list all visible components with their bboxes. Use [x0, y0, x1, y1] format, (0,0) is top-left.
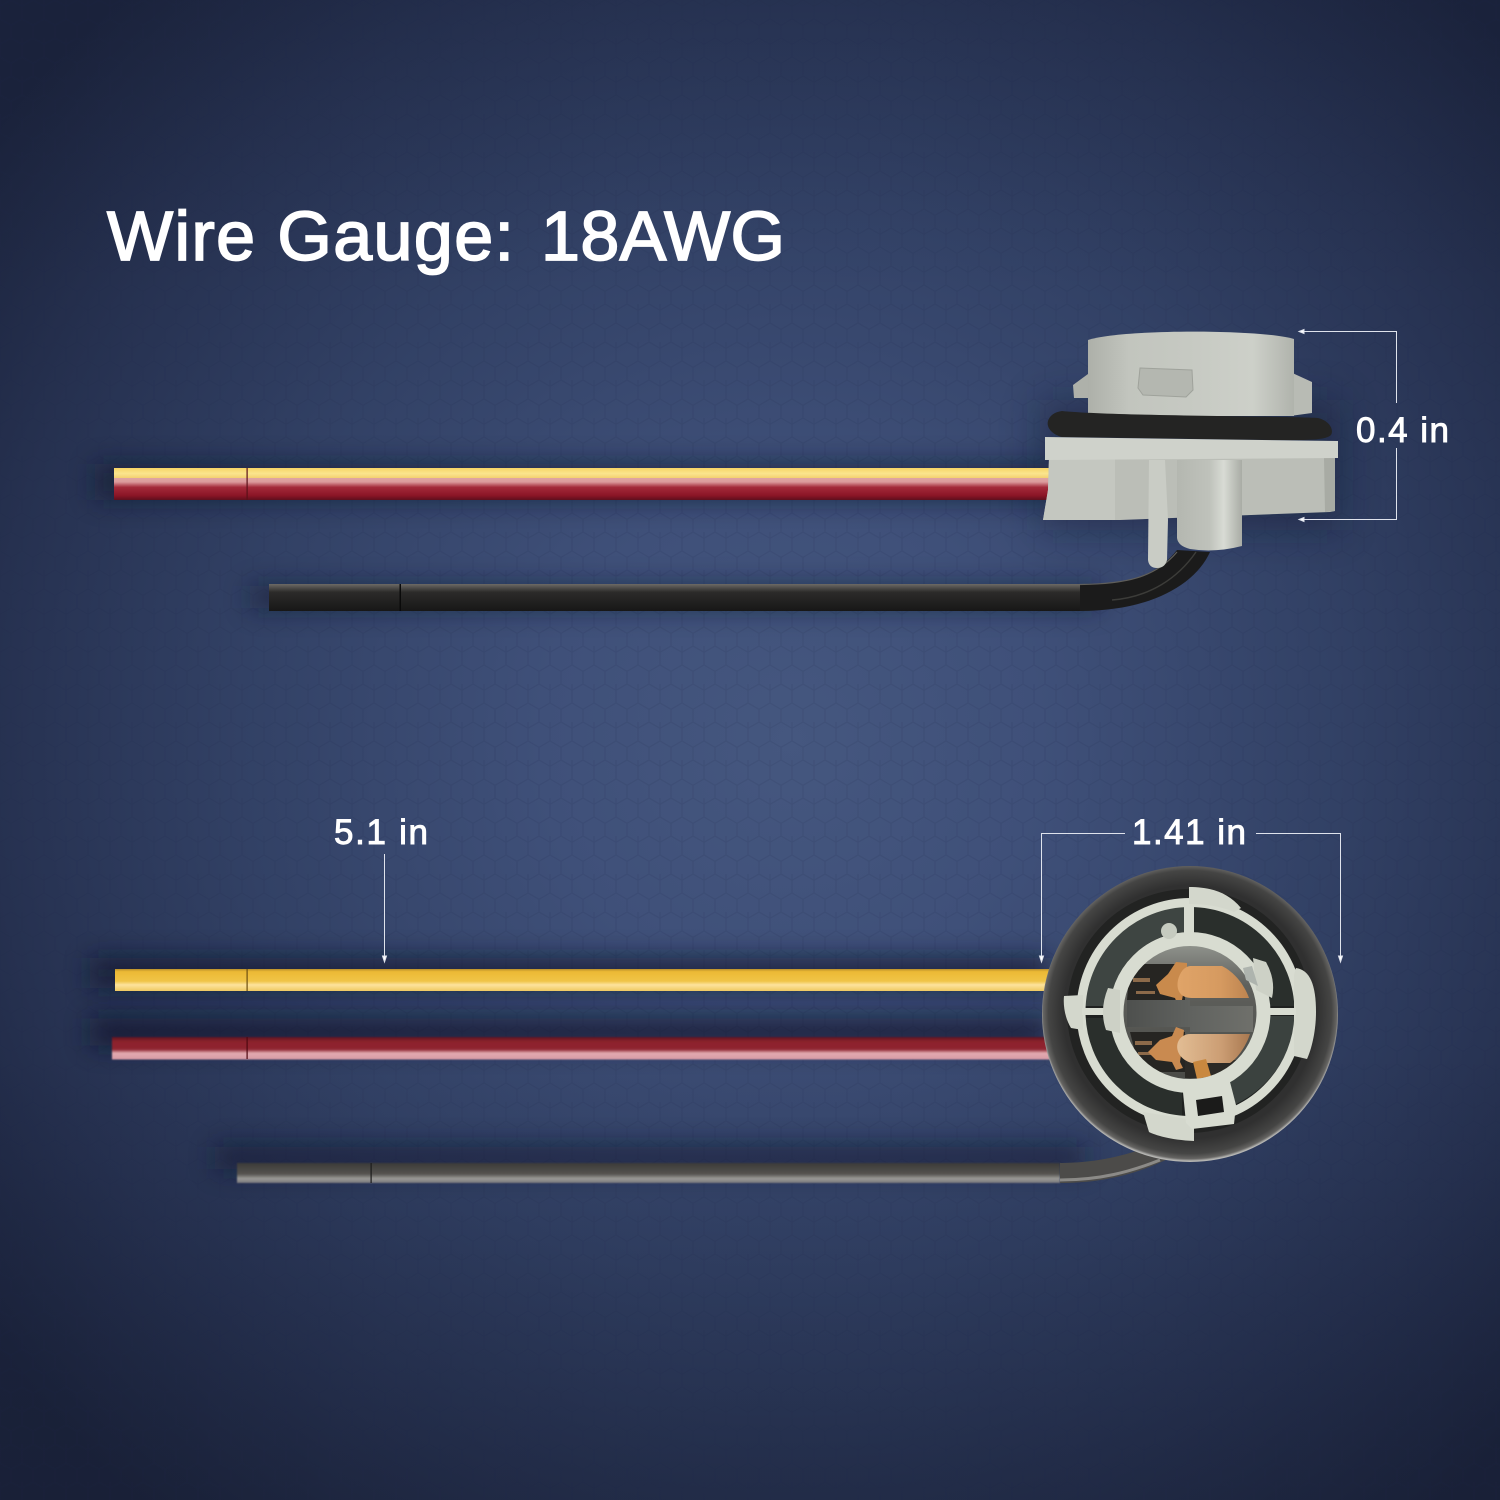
upper cylinder: [1088, 332, 1294, 416]
flange: [1045, 437, 1338, 460]
lower body: [1043, 458, 1335, 520]
rubber o-ring: [1048, 411, 1332, 440]
connector socket, front view: [1042, 866, 1338, 1162]
copper contact top: [1156, 962, 1187, 1000]
wire pair: yellow and red, side view: [114, 468, 1050, 500]
dark inner recess: [1067, 889, 1311, 1133]
raised lug on cylinder: [1138, 368, 1193, 397]
copper contact bottom: [1148, 1027, 1184, 1070]
inner bore with contacts: [1120, 945, 1260, 1081]
left and right tabs: [1073, 371, 1312, 416]
dimension: 0.4 in height: [1299, 330, 1396, 522]
locating pin: [1148, 460, 1168, 568]
spokes: [1082, 905, 1296, 1129]
rubber gasket: [1042, 866, 1338, 1162]
grey centre bar: [1127, 1000, 1253, 1032]
inner ring lobes: [1103, 923, 1273, 1033]
crimp tabs: [1133, 978, 1155, 1055]
bayonet tabs: [1064, 887, 1316, 1141]
yellow wire, front view: [115, 969, 1050, 991]
keyed square in base: [1196, 1096, 1224, 1116]
connector socket, side view: [1043, 332, 1338, 568]
title: [107, 197, 785, 275]
grey wire, front view: [237, 1146, 1170, 1183]
drop shadows behind wires: [90, 400, 1340, 1170]
title: Wire Gauge:: [107, 197, 514, 275]
title: 18AWG: [541, 197, 785, 275]
gap channel fill: [1083, 905, 1297, 1119]
label: 1.41 in: 1.41 in: [1132, 813, 1246, 852]
outer light ring: [1081, 902, 1299, 1120]
red wire, front view: [112, 1037, 1050, 1060]
inner light ring: [1116, 939, 1264, 1086]
black wire, side view: [269, 550, 1210, 611]
dimension: 5.1 in length: [382, 854, 386, 962]
label: 0.4 in: 0.4 in: [1356, 411, 1449, 450]
dimension: 1.41 in width: [1040, 834, 1342, 962]
wire post: [1177, 460, 1242, 550]
label: 5.1 in: 5.1 in: [334, 813, 428, 852]
dark cavities: [1127, 964, 1185, 1000]
